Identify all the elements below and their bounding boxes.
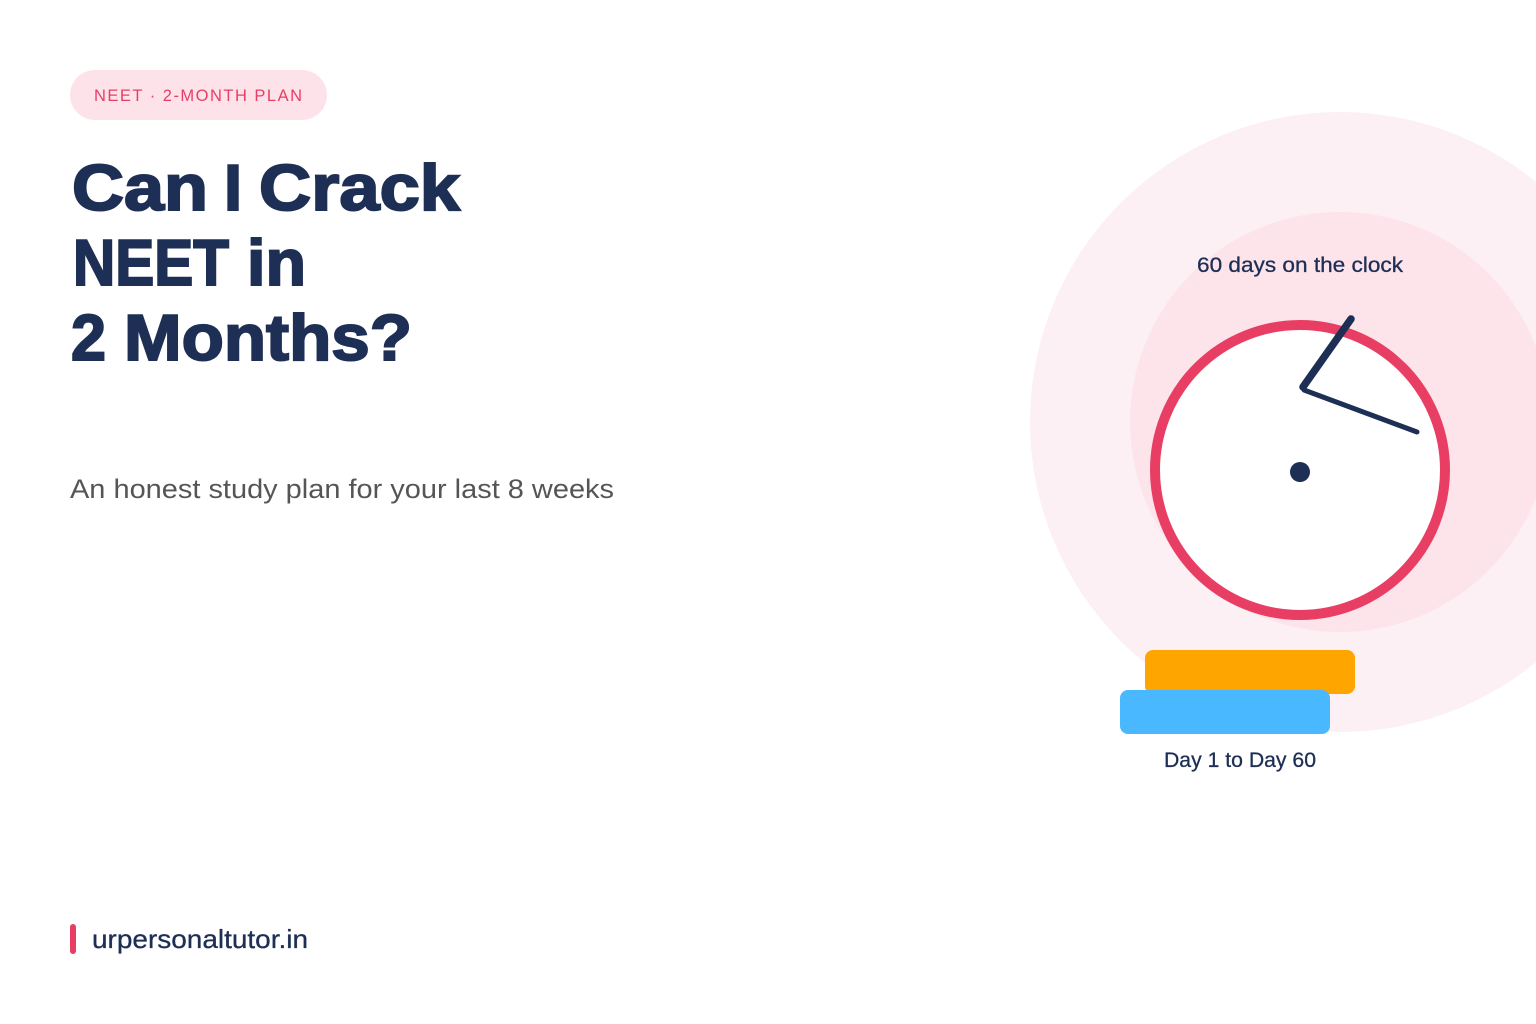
title: Can <box>72 151 208 224</box>
decorative concentric circles <box>1030 112 1536 732</box>
icon: stacked books <box>1120 650 1355 734</box>
books caption: Day 1 to Day 60 <box>1164 749 1316 772</box>
title: NEET <box>73 226 229 299</box>
footer: website: urpersonaltutor.in <box>92 924 308 954</box>
title: Crack <box>259 151 461 224</box>
icon: clock <box>1155 319 1445 615</box>
title: 2 <box>71 301 106 374</box>
title: Months? <box>124 301 412 374</box>
subtitle: An honest study plan for your last 8 weeks <box>70 474 614 504</box>
title <box>71 151 461 374</box>
badge: NEET 2-month plan <box>70 70 327 120</box>
title: I <box>224 151 242 224</box>
title: in <box>247 226 306 299</box>
clock caption: 60 days on the clock <box>1197 254 1404 277</box>
badge: NEET 2-month plan: NEET · 2-MONTH PLAN <box>94 87 302 105</box>
